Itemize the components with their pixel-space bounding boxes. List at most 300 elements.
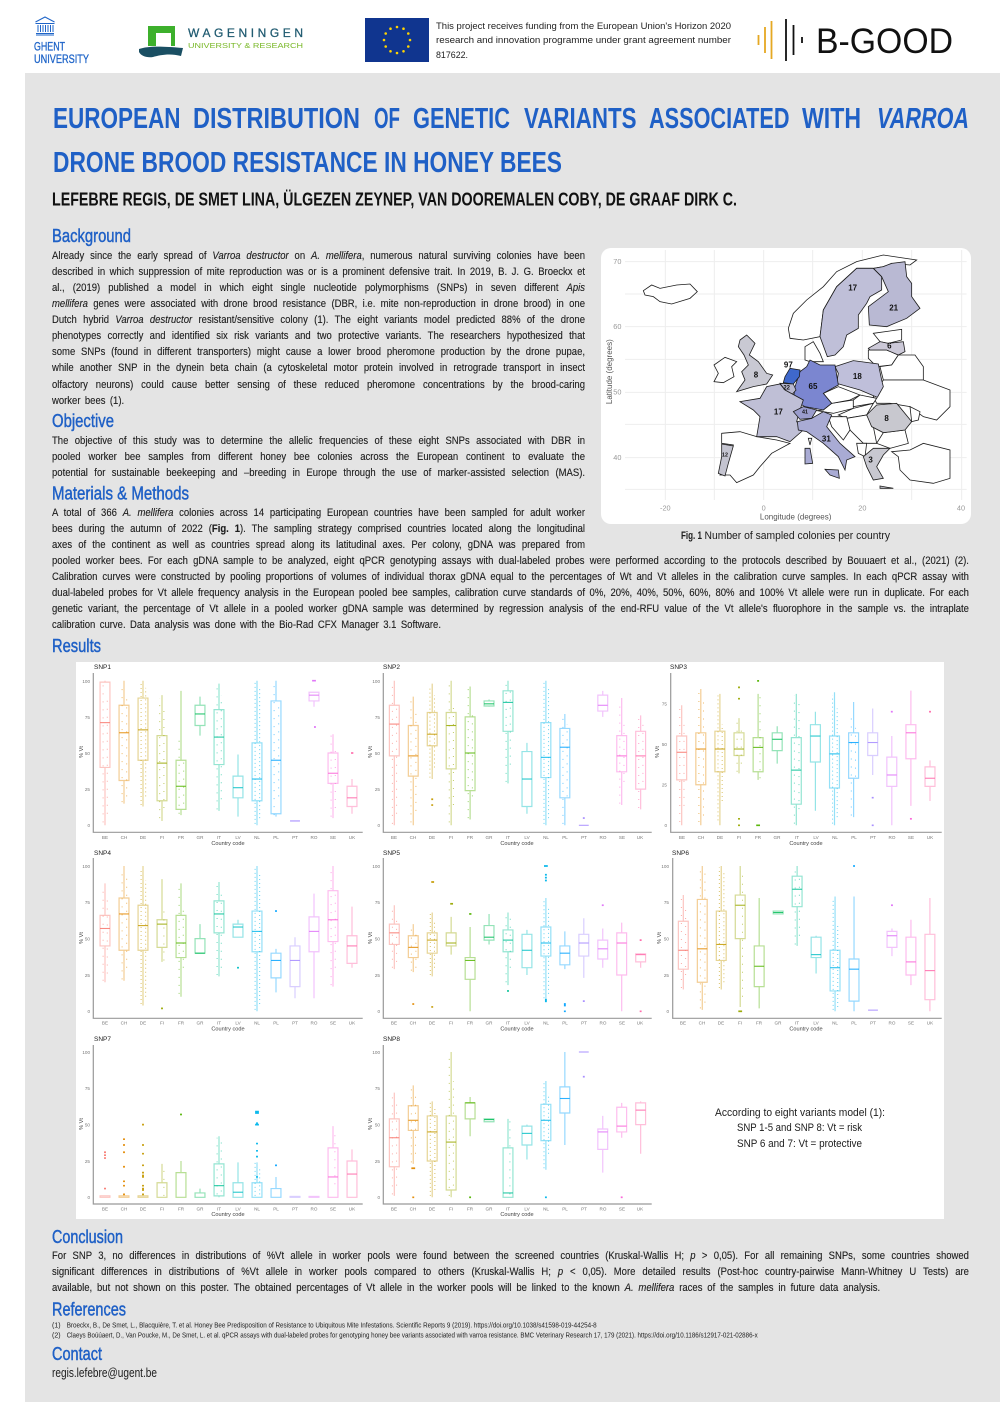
axes: % Vt (368, 1118, 374, 1130)
axes: FI (738, 1020, 742, 1026)
axes: BE (102, 835, 108, 840)
axes: IT (795, 835, 799, 840)
colony counts: 3 (868, 456, 873, 465)
chart title: SNP7 (94, 1036, 111, 1043)
funding statement: This project receives funding from the European Union's Horizon 2020 (436, 21, 731, 32)
axes: CH (410, 835, 416, 840)
axes: 0 (664, 823, 667, 828)
axes: RO (600, 835, 607, 840)
axes: LV (813, 835, 820, 840)
axes: DE (140, 835, 146, 840)
axes: 75 (662, 702, 667, 706)
axes: PL (851, 835, 857, 840)
axes: 0 (377, 1009, 380, 1014)
axes: UK (349, 835, 356, 840)
axes: 75 (375, 900, 380, 905)
axes: GR (197, 1020, 204, 1026)
axes: 50 (85, 936, 90, 942)
chart: SNP6 (657, 850, 942, 1032)
contact e-mail: regis.lefebre@ugent.be (52, 1366, 157, 1380)
axes: Country code (500, 1026, 534, 1032)
axes (368, 673, 652, 847)
funding statement (436, 21, 731, 61)
text block: Background: some SNPs (found in different transporters) might cause a lower brood pheromone production by the drone pupae, (52, 346, 585, 358)
title: ASSOCIATED (649, 103, 790, 135)
axes (368, 858, 652, 1032)
text block: Background: Dutch hybrid Varroa destructor resistant/sensitive colony (1). The eight variants model predicted 88% of the drone (52, 314, 585, 326)
axes: 75 (375, 715, 380, 720)
map axes: 40 (613, 453, 621, 462)
logo: Ghent University (34, 17, 89, 66)
axes: RO (600, 1206, 607, 1212)
chart: SNP7 (79, 1036, 363, 1218)
axes (655, 673, 942, 847)
axes: FR (467, 1206, 474, 1212)
logo: Wageningen University & Research: UNIVERSITY & RESEARCH (188, 43, 303, 50)
references list: (2) (52, 1332, 61, 1340)
axes: PL (273, 835, 279, 840)
axes: SE (330, 1020, 336, 1026)
map axes (605, 257, 965, 521)
axes: UK (927, 1020, 934, 1026)
axes (79, 1045, 363, 1218)
axes: % Vt (368, 746, 374, 758)
axes: RO (600, 1020, 607, 1026)
authors: LEFEBRE REGIS, DE SMET LINA, ÜLGEZEN ZEYNEP, VAN DOOREMALEN COBY, DE GRAAF DIRK C. (52, 190, 737, 210)
map axes: 60 (613, 322, 621, 331)
axes: LV (524, 1206, 531, 1212)
callout: variants model note (715, 1107, 885, 1150)
axes: FR (755, 835, 762, 840)
colony counts: 31 (822, 435, 831, 444)
heading: Conclusion: Conclusion (52, 1227, 123, 1247)
title (53, 103, 969, 179)
axes: PL (562, 1206, 568, 1212)
axes: PT (870, 835, 876, 840)
references list: Broeckx, B., De Smet, L., Blacquière, T. et al. Honey Bee Predisposition of Resistance to Ubiquitous Mite Infestations. Scientific Reports 9 (2019). https://doi.org/10.1038/s41598-019-44254-8 (67, 1322, 597, 1330)
chart title: SNP2 (383, 664, 400, 671)
boxplots (389, 681, 646, 825)
chart: SNP5 (368, 850, 652, 1032)
text block: Background: olfactory neurons) could cause better sensing of these reduced pheromone concentrations by the brood-caring (52, 378, 585, 390)
axes: Country code (500, 1212, 534, 1218)
axes: CH (410, 1020, 416, 1026)
axes: BE (391, 835, 397, 840)
figure caption: Number of sampled colonies per country (704, 530, 890, 542)
text block: Objective: potential for sustainable beekeeping and –breeding in Europe through the use of marker-assisted selection (MAS). (52, 467, 585, 479)
axes: GR (774, 835, 781, 840)
title: DISTRIBUTION (193, 103, 360, 135)
logo: B-GOOD: B-GOOD (816, 22, 953, 61)
axes: 50 (85, 1122, 90, 1128)
axes: Country code (211, 1026, 245, 1032)
axes: % Vt (79, 746, 85, 758)
axes: RO (889, 835, 896, 840)
axes: PL (273, 1206, 279, 1212)
axes: Country code (789, 1026, 823, 1032)
logo: Ghent University: UNIVERSITY (34, 54, 89, 66)
axes: Country code (500, 841, 534, 847)
logo: EU flag (365, 18, 429, 62)
map axes: Latitude (degrees) (605, 339, 614, 404)
axes: PL (851, 1020, 857, 1026)
axes: LV (235, 1020, 242, 1026)
text block: Materials and Methods, narrow part: A total of 366 A. mellifera colonies across 14 participating European countries have been sampled for adult worker (52, 507, 585, 519)
axes: FI (737, 835, 741, 840)
text block: Objective: pooled worker bee samples from different honey bee colonies across the European continent to evaluate the (52, 451, 585, 463)
chart title: SNP3 (670, 664, 687, 671)
axes (657, 858, 942, 1032)
references list (52, 1322, 758, 1340)
axes: BE (391, 1206, 397, 1212)
axes: BE (391, 1020, 397, 1026)
axes: DE (140, 1206, 146, 1212)
references list: Claeys Boúúaert, D., Van Poucke, M., De Smet, L. et al. qPCR assays with dual-labeled probes for genotyping honey bee variants associated with varroa resistance. BMC Veterinary Research 17, 179 (2021). https://doi.org/10.1186/s12917-021-02886-x (67, 1332, 758, 1340)
axes: IT (506, 1020, 510, 1026)
axes: NL (254, 835, 260, 840)
axes: 50 (662, 742, 667, 747)
axes: UK (637, 835, 644, 840)
logo: Wageningen University & Research (139, 26, 303, 57)
text block: Materials and Methods, narrow part: bees during the autumn of 2022 (Fig. 1). The sampling strategy comprised countries located along the longitudinal (52, 523, 585, 535)
axes: % Vt (79, 1118, 85, 1130)
axes: BE (102, 1020, 108, 1026)
axes: RO (889, 1020, 896, 1026)
axes: PL (562, 835, 568, 840)
text block: Objective: The objective of this study was to determine the allelic frequencies of these eight SNPs associated with DBR in (52, 435, 585, 447)
colony counts: 12 (722, 452, 728, 458)
axes: Country code (211, 841, 245, 847)
colony counts: 97 (784, 361, 793, 370)
title: WITH (802, 103, 861, 135)
axes: % Vt (368, 932, 374, 944)
axes: GR (486, 1020, 493, 1026)
heading: References: References (52, 1300, 126, 1320)
axes: NL (832, 835, 838, 840)
axes: NL (254, 1206, 260, 1212)
title: GENETIC (413, 103, 510, 135)
axes: 50 (664, 936, 669, 942)
axes: SE (619, 1206, 625, 1212)
axes: PT (292, 1020, 298, 1026)
axes: 50 (375, 936, 380, 942)
axes: 25 (662, 782, 667, 788)
axes: 100 (82, 679, 90, 684)
colony counts: 41 (802, 410, 808, 416)
axes: SE (330, 835, 336, 840)
axes: NL (254, 1020, 260, 1026)
map axes: 20 (858, 504, 866, 513)
axes: FI (160, 1206, 164, 1212)
boxplots (100, 866, 357, 1011)
funding statement: 817622. (436, 50, 468, 61)
colony counts: 8 (884, 414, 889, 423)
axes: BE (102, 1206, 108, 1212)
boxplots (100, 681, 357, 825)
map axes: 70 (613, 257, 621, 266)
text block: Background: mellifera genes were associated with drone brood resistance (DBR, i.e. mite non-reproduction in drone brood) in one (52, 298, 585, 310)
axes: 25 (664, 973, 669, 978)
logo: Wageningen University & Research: WAGENINGEN (188, 26, 303, 40)
axes: CH (410, 1206, 416, 1212)
axes: 25 (375, 973, 380, 978)
map axes: -20 (660, 504, 671, 513)
axes: 50 (85, 751, 90, 756)
axes: FI (449, 835, 453, 840)
axes: NL (543, 1206, 549, 1212)
axes: % Vt (79, 932, 85, 944)
axes: 75 (85, 900, 90, 905)
axes: 100 (372, 1050, 380, 1055)
axes: 50 (375, 1122, 380, 1128)
panel: map of sampled colonies (601, 248, 971, 524)
text block: Materials and Methods, full-width part: Calibration curves were constructed by pooling proportions of volumes of individual thorax gDNA equal to the percentages of Wt and Vt alleles in the calibration curve samples. In each qPCR assay with (52, 571, 969, 583)
colony counts: 22 (783, 386, 791, 392)
colony counts: 65 (809, 382, 818, 391)
axes: GR (486, 1206, 493, 1212)
axes: Country code (211, 1212, 245, 1218)
axes: GR (197, 835, 204, 840)
chart: SNP1 (79, 664, 363, 847)
axes: 25 (375, 1159, 380, 1164)
map axes: Longitude (degrees) (760, 512, 832, 521)
references list: (1) (52, 1322, 61, 1330)
text block: Conclusion: For SNP 3, no differences in distributions of %Vt allele in worker pools were found between the screened countries (Kruskal-Wallis H; p > 0,05). For all remaining SNPs, some countries showed (52, 1250, 969, 1262)
axes: 100 (372, 864, 380, 869)
axes: FI (160, 835, 164, 840)
axes: 75 (85, 1086, 90, 1091)
text block: Background: Already since the early spread of Varroa destructor on A. mellifera, numerous natural surviving colonies have been (52, 250, 585, 262)
axes: FR (467, 1020, 474, 1026)
colony counts: 17 (774, 408, 783, 417)
axes: UK (349, 1020, 356, 1026)
axes: PL (273, 1020, 279, 1026)
axes: RO (311, 1020, 318, 1026)
axes: 0 (377, 1195, 380, 1200)
title: OF (374, 103, 400, 135)
text block: Background: worker bees (1). (52, 395, 124, 407)
title: VARIANTS (524, 103, 636, 135)
axes: PT (581, 1020, 587, 1026)
axes: PT (292, 1206, 298, 1212)
axes: LV (235, 835, 242, 840)
axes: GR (197, 1206, 204, 1212)
axes: FR (756, 1020, 763, 1026)
axes: SE (908, 835, 914, 840)
text block: Materials and Methods, narrow part (52, 507, 585, 551)
chart title: SNP4 (94, 850, 111, 857)
callout: variants model note: SNP 1-5 and SNP 8: Vt = risk (737, 1122, 862, 1134)
title: VARROA (877, 103, 969, 135)
axes: GR (775, 1020, 782, 1026)
axes: FR (178, 1020, 185, 1026)
title: DRONE BROOD RESISTANCE IN HONEY BEES (53, 147, 562, 179)
boxplots (677, 681, 935, 825)
colony counts (722, 284, 899, 465)
axes: LV (813, 1020, 820, 1026)
colony counts: 6 (887, 342, 892, 351)
map axes: 50 (613, 388, 621, 397)
text block: Materials and Methods, full-width part: genetic variant, the percentage of Vt allele in a pooled worker gDNA sample was determined by regression analysis of the end-RFU value of the Vt allele's fluorophore in the sample vs. the intraplate (52, 603, 969, 615)
axes: CH (121, 1020, 127, 1026)
text block: Background: while another SNP in the dynein beta chain (a cytoskeletal motor protein involved in retrograde transport in insect (52, 362, 585, 374)
axes: 100 (661, 864, 669, 869)
axes: 0 (666, 1009, 669, 1014)
axes: Country code (789, 841, 823, 847)
axes: 0 (377, 823, 380, 828)
axes: FI (449, 1020, 453, 1026)
title: EUROPEAN (53, 103, 180, 135)
axes: IT (217, 1020, 221, 1026)
axes: DE (429, 835, 435, 840)
axes (79, 858, 363, 1032)
map axes: 40 (957, 504, 965, 513)
sampled countries (718, 262, 920, 488)
figure caption: Fig. 1 (681, 530, 702, 542)
text block: Materials and Methods, narrow part: axes of the continent as well as countries spread along its latitudinal axes. Per colony, gDNA was prepared from (52, 539, 585, 551)
axes: 100 (82, 864, 90, 869)
white countries (643, 255, 950, 483)
axes: FR (178, 835, 185, 840)
text block: Conclusion: significant differences in distributions of %Vt allele in worker pools compared to others (Kruskal-Wallis H; p < 0,05). More detailed results (Post-hoc country-pairwise Mann-Whitney U Tests) are (52, 1266, 969, 1278)
chart: SNP3 (655, 664, 942, 847)
text block: Materials and Methods, full-width part (52, 555, 969, 631)
axes: CH (121, 1206, 127, 1212)
axes: 25 (375, 787, 380, 792)
text block: Background (52, 250, 585, 407)
text block: Objective (52, 435, 585, 479)
axes: GR (486, 835, 493, 840)
axes: UK (637, 1206, 644, 1212)
text block: Materials and Methods, full-width part: calibration curve. Data analysis was done with the Bio-Rad CFX Manager 3.1 Software. (52, 619, 441, 631)
axes (79, 673, 363, 847)
chart title: SNP8 (383, 1036, 400, 1043)
chart: SNP8 (368, 1036, 652, 1218)
axes: SE (619, 1020, 625, 1026)
colony counts: 18 (853, 372, 862, 381)
axes: PT (581, 835, 587, 840)
axes: 0 (87, 1009, 90, 1014)
colony counts: 8 (754, 371, 759, 380)
text block: Background: phenotypes correctly and identified six risk variants and two protective variants. The researchers hypothesized that (52, 330, 585, 342)
axes: IT (506, 1206, 510, 1212)
axes: IT (795, 1020, 799, 1026)
text block: Background: al., (2019) published a model in which eight single nucleotide polymorphisms (SNPs) in seven different Apis (52, 282, 585, 294)
axes: SE (619, 835, 625, 840)
axes: UK (927, 835, 934, 840)
axes: NL (543, 1020, 549, 1026)
axes: 25 (85, 787, 90, 792)
text block: Materials and Methods, full-width part: dual-labeled probes for Vt allele frequency analysis in the European pooled bee samples, calibration curve standards of 0%, 20%, 40%, 50%, 60%, 80% and 100% Vt allele were run in duplicate. For each (52, 587, 969, 599)
axes: FI (449, 1206, 453, 1212)
axes: FR (178, 1206, 185, 1212)
text block: Materials and Methods, full-width part: pooled worker bees. For each gDNA sample to be analyzed, eight qPCR genotyping assays with dual-labeled probes were performed according to the protocols described by Bouuaert et al., (2021) (2). (52, 555, 969, 567)
axes: DE (429, 1206, 435, 1212)
axes: CH (698, 835, 704, 840)
axes: DE (717, 835, 723, 840)
colony counts: 17 (848, 284, 858, 293)
axes: BE (680, 1020, 686, 1026)
funding statement: research and innovation programme under grant agreement number (436, 35, 731, 46)
axes: PL (562, 1020, 568, 1026)
axes: 75 (664, 900, 669, 905)
text block: Conclusion (52, 1250, 969, 1294)
text block: Background: described in which suppression of mite reproduction was or is a prominent defensive trait. In 2019, B. J. G. Broeckx et (52, 266, 585, 278)
axes (368, 1045, 652, 1218)
panel: results boxplots (76, 662, 944, 1219)
heading: Materials & Methods: Materials & Methods (52, 484, 189, 504)
axes: 75 (85, 715, 90, 720)
axes: UK (637, 1020, 644, 1026)
chart: SNP4 (79, 850, 363, 1032)
axes: SE (908, 1020, 914, 1026)
axes: 100 (372, 679, 380, 684)
heading: Objective: Objective (52, 411, 114, 431)
axes: BE (679, 835, 685, 840)
axes: 25 (85, 973, 90, 978)
callout: variants model note: According to eight variants model (1): (715, 1107, 885, 1119)
boxplots (678, 866, 935, 1011)
axes: 50 (375, 751, 380, 756)
boxplots (389, 1052, 646, 1197)
axes: LV (524, 835, 531, 840)
axes: NL (543, 835, 549, 840)
axes: 25 (85, 1159, 90, 1164)
axes: DE (140, 1020, 146, 1026)
axes: DE (429, 1020, 435, 1026)
axes: CH (121, 835, 127, 840)
axes: RO (311, 835, 318, 840)
axes: % Vt (657, 932, 663, 944)
heading: Results: Results (52, 636, 101, 656)
axes: FI (160, 1020, 164, 1026)
logo: B-GOOD (758, 19, 953, 61)
axes: NL (832, 1020, 838, 1026)
chart title: SNP6 (672, 850, 689, 857)
axes: 0 (87, 823, 90, 828)
axes: RO (311, 1206, 318, 1212)
axes: SE (330, 1206, 336, 1212)
axes: 75 (375, 1086, 380, 1091)
colony counts: 21 (889, 304, 899, 313)
axes: PT (292, 835, 298, 840)
heading: Background: Background (52, 226, 131, 246)
callout: variants model note: SNP 6 and 7: Vt = protective (737, 1138, 862, 1150)
axes: PT (581, 1206, 587, 1212)
axes: 100 (82, 1050, 90, 1055)
map axes: 0 (762, 504, 766, 513)
axes: LV (235, 1206, 242, 1212)
axes: IT (506, 835, 510, 840)
chart title: SNP1 (94, 664, 111, 671)
axes: LV (524, 1020, 531, 1026)
logo: Ghent University: GHENT (34, 42, 65, 54)
text block: Conclusion: available, but not shown on this poster. The obtained percentages of Vt allele in the worker pools will be linked to the known A. mellifera races of the samples in future data analysis. (52, 1282, 880, 1294)
axes: PT (870, 1020, 876, 1026)
axes: CH (699, 1020, 705, 1026)
axes: UK (349, 1206, 356, 1212)
axes: 0 (87, 1195, 90, 1200)
chart: SNP2 (368, 664, 652, 847)
axes: % Vt (655, 746, 661, 758)
axes: DE (718, 1020, 724, 1026)
axes: IT (217, 835, 221, 840)
chart title: SNP5 (383, 850, 400, 857)
heading: Contact: Contact (52, 1344, 102, 1364)
axes: FR (467, 835, 474, 840)
axes: IT (217, 1206, 221, 1212)
boxplots (100, 1112, 357, 1197)
